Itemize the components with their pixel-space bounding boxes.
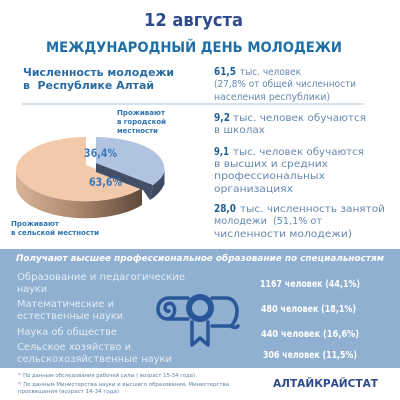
specialty: education: науки <box>17 284 47 295</box>
label: urban: Проживают <box>117 108 166 117</box>
specialty: agriculture: Сельское хозяйство и <box>17 342 131 353</box>
heading: youth population: в Республике Алтай <box>23 79 154 92</box>
value: mathematics: 480 человек (18,1%) <box>261 304 356 315</box>
stat: schools: в школах <box>214 125 265 136</box>
pie slice: urban outer wall <box>150 170 164 200</box>
stat: total youth: 61,5 <box>214 65 236 78</box>
specialty: mathematics and natural sciences: Математические и <box>17 299 114 310</box>
stat: total youth: (27,8% от общей численности <box>214 79 356 90</box>
value: agriculture: 306 человек (11,5%) <box>263 350 357 361</box>
label: urban: местности <box>117 126 158 135</box>
heading: youth population: Численность молодежи <box>23 66 174 79</box>
heading: youth population <box>23 66 174 92</box>
specialty: agriculture <box>17 342 172 365</box>
label: rural <box>11 219 99 237</box>
specialty: agriculture: сельскохозяйственные науки <box>17 354 172 365</box>
pie slice: urban inner wall <box>96 163 153 200</box>
pie slice: rural top <box>16 137 142 201</box>
footnotes: просвещения (возраст 14-34 года) <box>18 389 119 395</box>
specialty: education <box>17 272 185 295</box>
value: rural share: 63,6% <box>89 175 122 189</box>
label: urban: в городской <box>117 117 166 126</box>
footnotes <box>18 372 229 395</box>
stat: higher and vocational education: организациях <box>214 184 293 195</box>
footnotes: ²⁾ По данным Министерства науки и высшего образования, Министерства <box>18 382 229 388</box>
specialty: education: Образование и педагогические <box>17 272 185 283</box>
stat: higher and vocational education <box>214 145 364 195</box>
pie slice: urban top <box>96 137 164 185</box>
label: rural: Проживают <box>11 219 60 228</box>
stat: employed youth: 28,0 <box>214 202 236 215</box>
stat: total youth <box>214 65 356 103</box>
title: event name: МЕЖДУНАРОДНЫЙ ДЕНЬ МОЛОДЕЖИ <box>46 39 342 56</box>
stat: higher and vocational education: 9,1 <box>214 145 229 158</box>
value: education: 1167 человек (44,1%) <box>260 279 360 290</box>
title: date: 12 августа <box>144 10 243 31</box>
icon: diploma scroll with medal <box>158 297 238 345</box>
stat: employed youth: численности молодежи) <box>214 229 352 240</box>
stat: schools: тыс. человек обучаются <box>233 113 366 124</box>
value: social science: 440 человек (16,6%) <box>261 329 359 340</box>
specialty: mathematics and natural sciences: естественные науки <box>17 311 123 322</box>
label: urban <box>117 108 166 135</box>
footnotes: ¹⁾ По данным обследования рабочей силы ( возраст 15-34 года) <box>18 372 195 379</box>
source logo text: АЛТАЙКРАЙСТАТ <box>273 377 378 390</box>
stat: employed youth: тыс. численность занятой <box>240 204 385 215</box>
stat: total youth: населения республики) <box>214 92 330 103</box>
value: urban share: 36,4% <box>84 146 117 160</box>
stat: schools: 9,2 <box>214 111 230 124</box>
label: rural: в сельской местности <box>11 228 99 237</box>
stat: higher and vocational education: в высших и средних <box>214 159 328 170</box>
stat: higher and vocational education: профессиональных <box>214 171 325 182</box>
pie slice: rural side wall <box>16 170 142 218</box>
stat: schools <box>214 111 366 136</box>
panel: higher education by specialty <box>0 249 400 368</box>
stat: total youth: тыс. человек <box>240 67 301 78</box>
stat: employed youth: молодежи (51,1% от <box>214 216 322 227</box>
stat: employed youth <box>214 202 385 240</box>
specialty: social science: Наука об обществе <box>17 327 117 338</box>
panel heading: Получают высшее профессиональное образование по специальностям <box>16 253 385 264</box>
stat: higher and vocational education: тыс. человек обучаются <box>233 147 364 158</box>
pie chart: urban and rural youth <box>16 137 164 218</box>
specialty: mathematics and natural sciences <box>17 299 123 322</box>
